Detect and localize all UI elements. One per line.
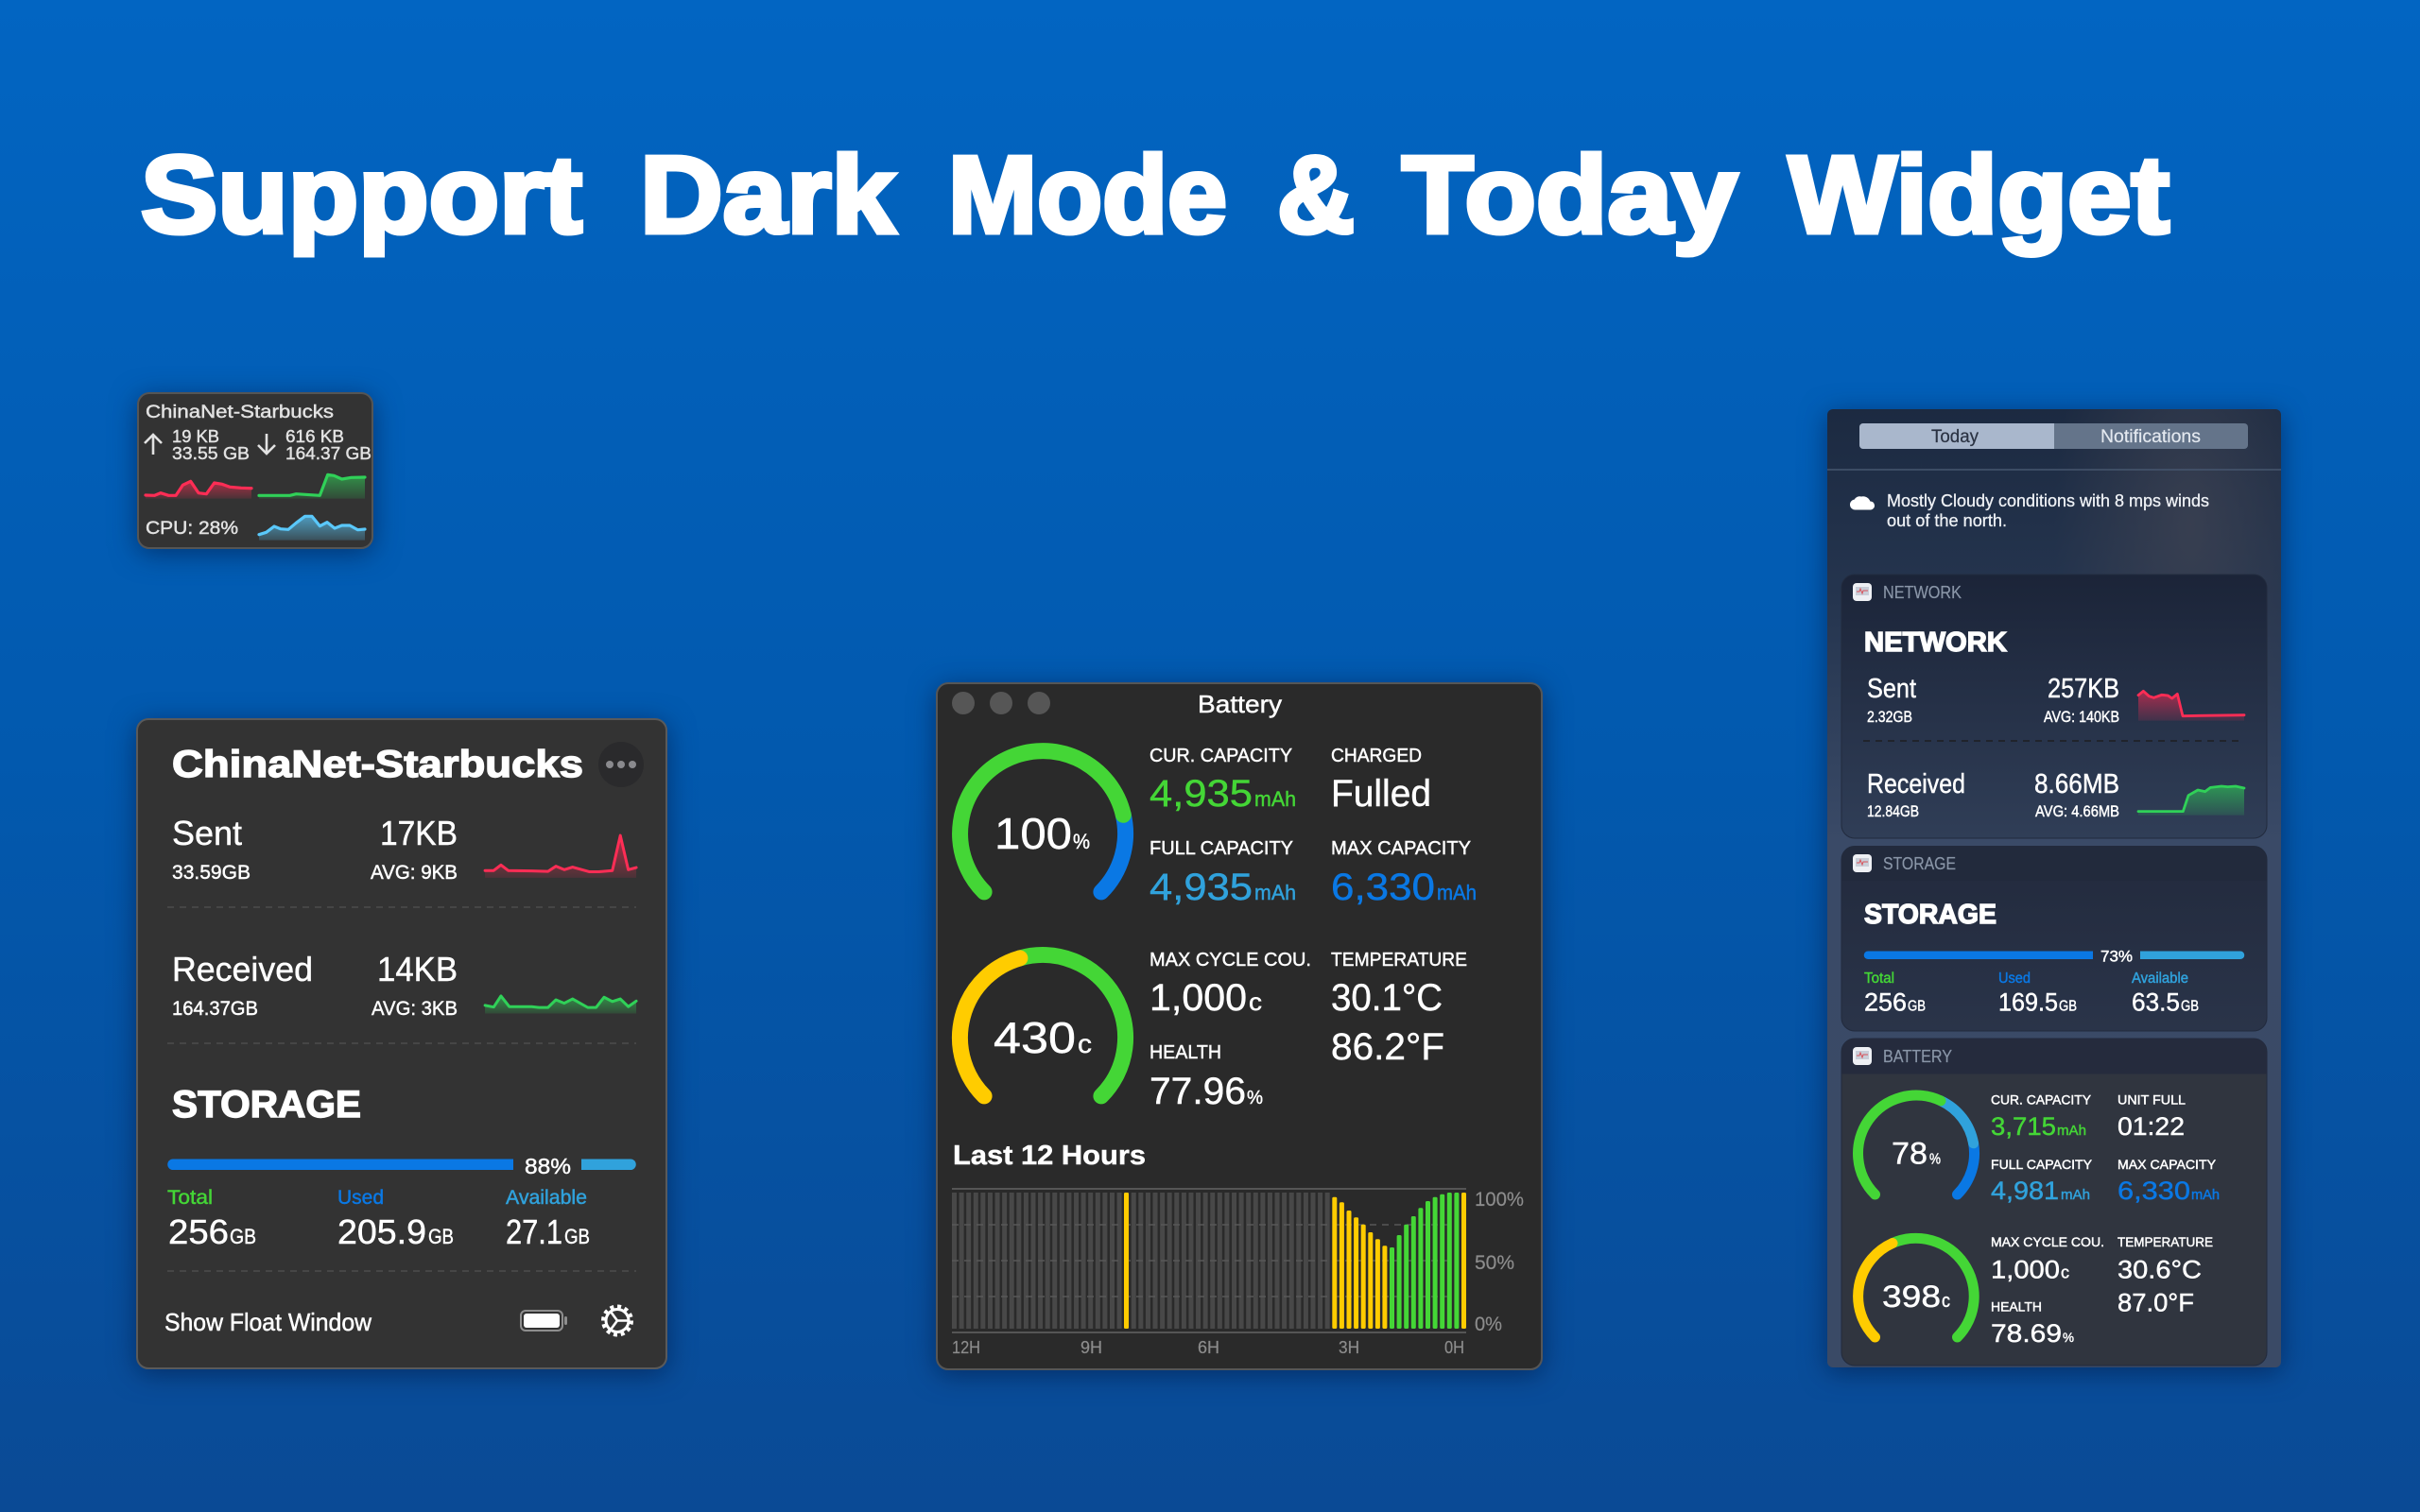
float network name: ChinaNet-Starbucks [146, 402, 334, 422]
chart y axis labels: 100% [1475, 1189, 1524, 1211]
heading: network name: ChinaNet-Starbucks [172, 744, 583, 785]
sparkline: received [2138, 786, 2244, 816]
storage bar [1864, 947, 2244, 966]
stat: max cycle count [1991, 1234, 2104, 1283]
icon: settings gear [603, 1306, 631, 1334]
window controls [952, 692, 1050, 714]
panel: today widget sidebar [1827, 409, 2281, 1367]
icon: battery [521, 1311, 567, 1331]
stat: full capacity [1991, 1157, 2093, 1205]
stat: temperature: TEMPERATURE [2118, 1234, 2213, 1249]
bar chart: last 12 hours [952, 1189, 1466, 1332]
show float window label: Show Float Window [164, 1308, 372, 1336]
stat: current capacity: 4,935 [1150, 773, 1253, 815]
received row: Received [172, 950, 313, 988]
stat: used: 205.9 [337, 1212, 426, 1251]
stat: full capacity: 4,935 [1150, 867, 1253, 908]
stat: health: % [1247, 1088, 1263, 1108]
stat: total: GB [230, 1225, 256, 1248]
stat: max capacity [1331, 838, 1477, 908]
stat: charged: Fulled [1331, 773, 1431, 815]
title: Widget [1789, 133, 2169, 256]
chart y axis labels [1475, 1189, 1524, 1335]
stat: max capacity: 6,330 [1331, 867, 1435, 908]
sent row: AVG: 140KB [2044, 709, 2119, 726]
sent row: 2.32GB [1867, 709, 1912, 726]
sparkline: received [485, 996, 636, 1013]
title [141, 133, 2169, 256]
gauge: cycle count: 398 [1882, 1280, 1941, 1314]
title: Today [1402, 133, 1737, 256]
gauge: charge percent: 100 [994, 809, 1072, 858]
stat: current capacity: mAh [1254, 787, 1296, 811]
title: Dark [640, 133, 895, 256]
sent row: Sent [1867, 674, 1916, 704]
stat: available: 63.5 [2132, 988, 2180, 1017]
stat: current capacity [1150, 746, 1296, 815]
heading: last 12 hours: Last 12 Hours [953, 1141, 1146, 1171]
icon: app [1853, 583, 1872, 601]
stat: total: 256 [1864, 988, 1907, 1017]
received row: 14KB [377, 950, 458, 988]
stat: max capacity [2118, 1157, 2220, 1205]
chart x axis labels: 6H [1198, 1338, 1219, 1357]
chart x axis labels: 3H [1339, 1338, 1359, 1357]
segmented control: Today [1931, 427, 1979, 447]
stat: available: GB [564, 1225, 590, 1248]
stat: temperature: 86.2°F [1331, 1026, 1444, 1068]
gauge: cycle count: c [1942, 1291, 1950, 1312]
weather text [1887, 490, 2209, 530]
segmented control [1859, 423, 2248, 449]
segmented control: Notifications [2100, 427, 2201, 447]
stat: current capacity [1991, 1092, 2092, 1141]
heading: storage: STORAGE [172, 1084, 361, 1125]
stat: current capacity: 3,715 [1991, 1112, 2056, 1141]
stat: temperature: 30.1°C [1331, 977, 1443, 1019]
gauge: charge percent: 78 [1892, 1136, 1927, 1170]
stat: health: HEALTH [1150, 1042, 1221, 1063]
sent row: 17KB [380, 814, 458, 852]
widget card: network [1841, 575, 2267, 838]
stat: full capacity: FULL CAPACITY [1991, 1157, 2093, 1172]
download stats: 164.37 GB [285, 444, 372, 463]
stat: max cycle count: MAX CYCLE COU. [1991, 1234, 2104, 1249]
stat: available [2132, 971, 2199, 1017]
stat: total: 256 [168, 1212, 229, 1251]
widget card: storage [1841, 847, 2267, 1031]
stat: charged: CHARGED [1331, 746, 1422, 766]
stat: until full: 01:22 [2118, 1112, 2185, 1141]
stat: max cycle count: c [1249, 988, 1262, 1016]
icon: cloud [1850, 497, 1875, 509]
stat: temperature: TEMPERATURE [1331, 950, 1467, 971]
stat: until full: UNIT FULL [2118, 1092, 2186, 1108]
received row: 12.84GB [1867, 803, 1919, 820]
sent row [1867, 674, 2119, 726]
stat: total: GB [1908, 998, 1926, 1015]
panel: battery window [937, 683, 1542, 1369]
chart x axis labels: 9H [1080, 1338, 1102, 1357]
gauge: cycle count [1858, 1238, 1974, 1337]
chart x axis labels [952, 1338, 1464, 1357]
stat: used [1998, 971, 2077, 1017]
stat: available: GB [2181, 998, 2199, 1015]
chart y axis labels: 0% [1475, 1314, 1502, 1335]
stat: available: Available [506, 1187, 587, 1209]
widget label: NETWORK [1883, 583, 1962, 602]
stat: max cycle count: MAX CYCLE COU. [1150, 950, 1311, 971]
stat: temperature [1331, 950, 1467, 1068]
stat: available: 27.1 [506, 1212, 562, 1251]
stat: temperature: 87.0°F [2118, 1289, 2194, 1317]
panel: network and storage menu [137, 719, 666, 1368]
storage bar: 73% [2100, 947, 2133, 966]
received row: AVG: 3KB [372, 998, 458, 1020]
storage bar: 88% [525, 1154, 571, 1178]
title: & [1277, 133, 1355, 256]
icon: app [1853, 1047, 1872, 1065]
sent row: AVG: 9KB [371, 862, 458, 884]
stat: full capacity: 4,981 [1991, 1177, 2059, 1205]
stat: full capacity: mAh [1254, 881, 1296, 904]
sparkline: received [259, 474, 365, 499]
received row [172, 950, 458, 1020]
stat: max capacity: mAh [1437, 881, 1477, 904]
heading: storage: STORAGE [1864, 900, 1996, 930]
chart x axis labels: 0H [1444, 1338, 1464, 1357]
download stats: 616 KB [285, 427, 344, 446]
title: Support [141, 133, 582, 256]
icon: more button [598, 742, 644, 787]
stat: charged [1331, 746, 1431, 815]
chart y axis labels: 50% [1475, 1252, 1514, 1274]
stat: total: Total [167, 1187, 213, 1209]
gauge: charge percent: % [1929, 1151, 1941, 1168]
stat: used [337, 1187, 454, 1251]
stat: max capacity: MAX CAPACITY [1331, 838, 1471, 859]
CPU label: CPU: 28% [146, 518, 238, 539]
stat: max capacity: 6,330 [2118, 1177, 2190, 1205]
received row: 8.66MB [2034, 769, 2119, 799]
stat: until full [2118, 1092, 2186, 1141]
stat: used: GB [428, 1225, 454, 1248]
icon: upload arrow [145, 435, 162, 455]
gauge: cycle count [959, 954, 1126, 1096]
stat: total [1864, 971, 1926, 1017]
upload stats: 19 KB [172, 427, 219, 446]
stat: max cycle count: c [2061, 1263, 2069, 1281]
gauge: charge percent [960, 751, 1126, 892]
stat: health: % [2063, 1330, 2074, 1345]
stat: total: Total [1864, 971, 1894, 987]
gauge: charge percent: % [1073, 830, 1090, 853]
gauge: charge percent [1858, 1095, 1975, 1194]
stat: max cycle count: 1,000 [1150, 977, 1247, 1019]
stat: max capacity: MAX CAPACITY [2118, 1157, 2217, 1172]
sent row: Sent [172, 814, 242, 852]
stat: available: Available [2132, 971, 2188, 987]
panel: float window [138, 393, 372, 548]
gauge: cycle count: c [1078, 1029, 1092, 1058]
sparkline: sent [146, 481, 251, 499]
upload stats: 33.55 GB [172, 444, 250, 463]
received row: Received [1867, 769, 1965, 799]
stat: current capacity: mAh [2057, 1123, 2086, 1139]
sparkline: sent [485, 835, 636, 878]
received row [1867, 769, 2119, 820]
stat: temperature: 30.6°C [2118, 1255, 2202, 1283]
widget card: battery [1841, 1039, 2267, 1366]
stat: used: Used [337, 1187, 384, 1209]
sparkline: sent [2138, 691, 2244, 721]
stat: available [506, 1187, 590, 1251]
stat: used: Used [1998, 971, 2031, 987]
heading: network: NETWORK [1864, 627, 2007, 658]
stat: used: 169.5 [1998, 988, 2058, 1017]
upload stats [172, 427, 250, 463]
weather text: out of the north. [1887, 510, 2007, 530]
stat: total [167, 1187, 256, 1251]
window title: Battery [1198, 690, 1282, 718]
stat: health: 78.69 [1991, 1319, 2062, 1348]
stat: max cycle count [1150, 950, 1311, 1019]
sent row: 257KB [2048, 674, 2119, 704]
sparkline: CPU [259, 516, 365, 541]
stat: max cycle count: 1,000 [1991, 1255, 2060, 1283]
icon: app [1853, 854, 1872, 872]
gauge: cycle count: 430 [994, 1013, 1076, 1062]
icon: download arrow [258, 434, 275, 454]
sent row: 33.59GB [172, 862, 251, 884]
storage bar [167, 1154, 636, 1178]
stat: temperature [2118, 1234, 2213, 1317]
received row: AVG: 4.66MB [2035, 803, 2119, 820]
sent row [172, 814, 458, 884]
title: Mode [948, 133, 1227, 256]
weather text: Mostly Cloudy conditions with 8 mps winds [1887, 490, 2209, 510]
stat: used: GB [2059, 998, 2077, 1015]
stat: health: HEALTH [1991, 1298, 2042, 1314]
stat: current capacity: CUR. CAPACITY [1991, 1092, 2092, 1108]
received row: 164.37GB [172, 998, 258, 1020]
stat: current capacity: CUR. CAPACITY [1150, 746, 1292, 766]
download stats [285, 427, 372, 463]
stat: health [1991, 1298, 2074, 1348]
stat: full capacity: FULL CAPACITY [1150, 838, 1293, 859]
stat: full capacity [1150, 838, 1296, 908]
widget label: BATTERY [1883, 1047, 1952, 1066]
stat: health: 77.96 [1150, 1071, 1246, 1112]
stat: health [1150, 1042, 1263, 1112]
chart x axis labels: 12H [952, 1338, 980, 1357]
stat: full capacity: mAh [2061, 1187, 2090, 1203]
stat: max capacity: mAh [2191, 1187, 2220, 1203]
widget label: STORAGE [1883, 854, 1956, 873]
